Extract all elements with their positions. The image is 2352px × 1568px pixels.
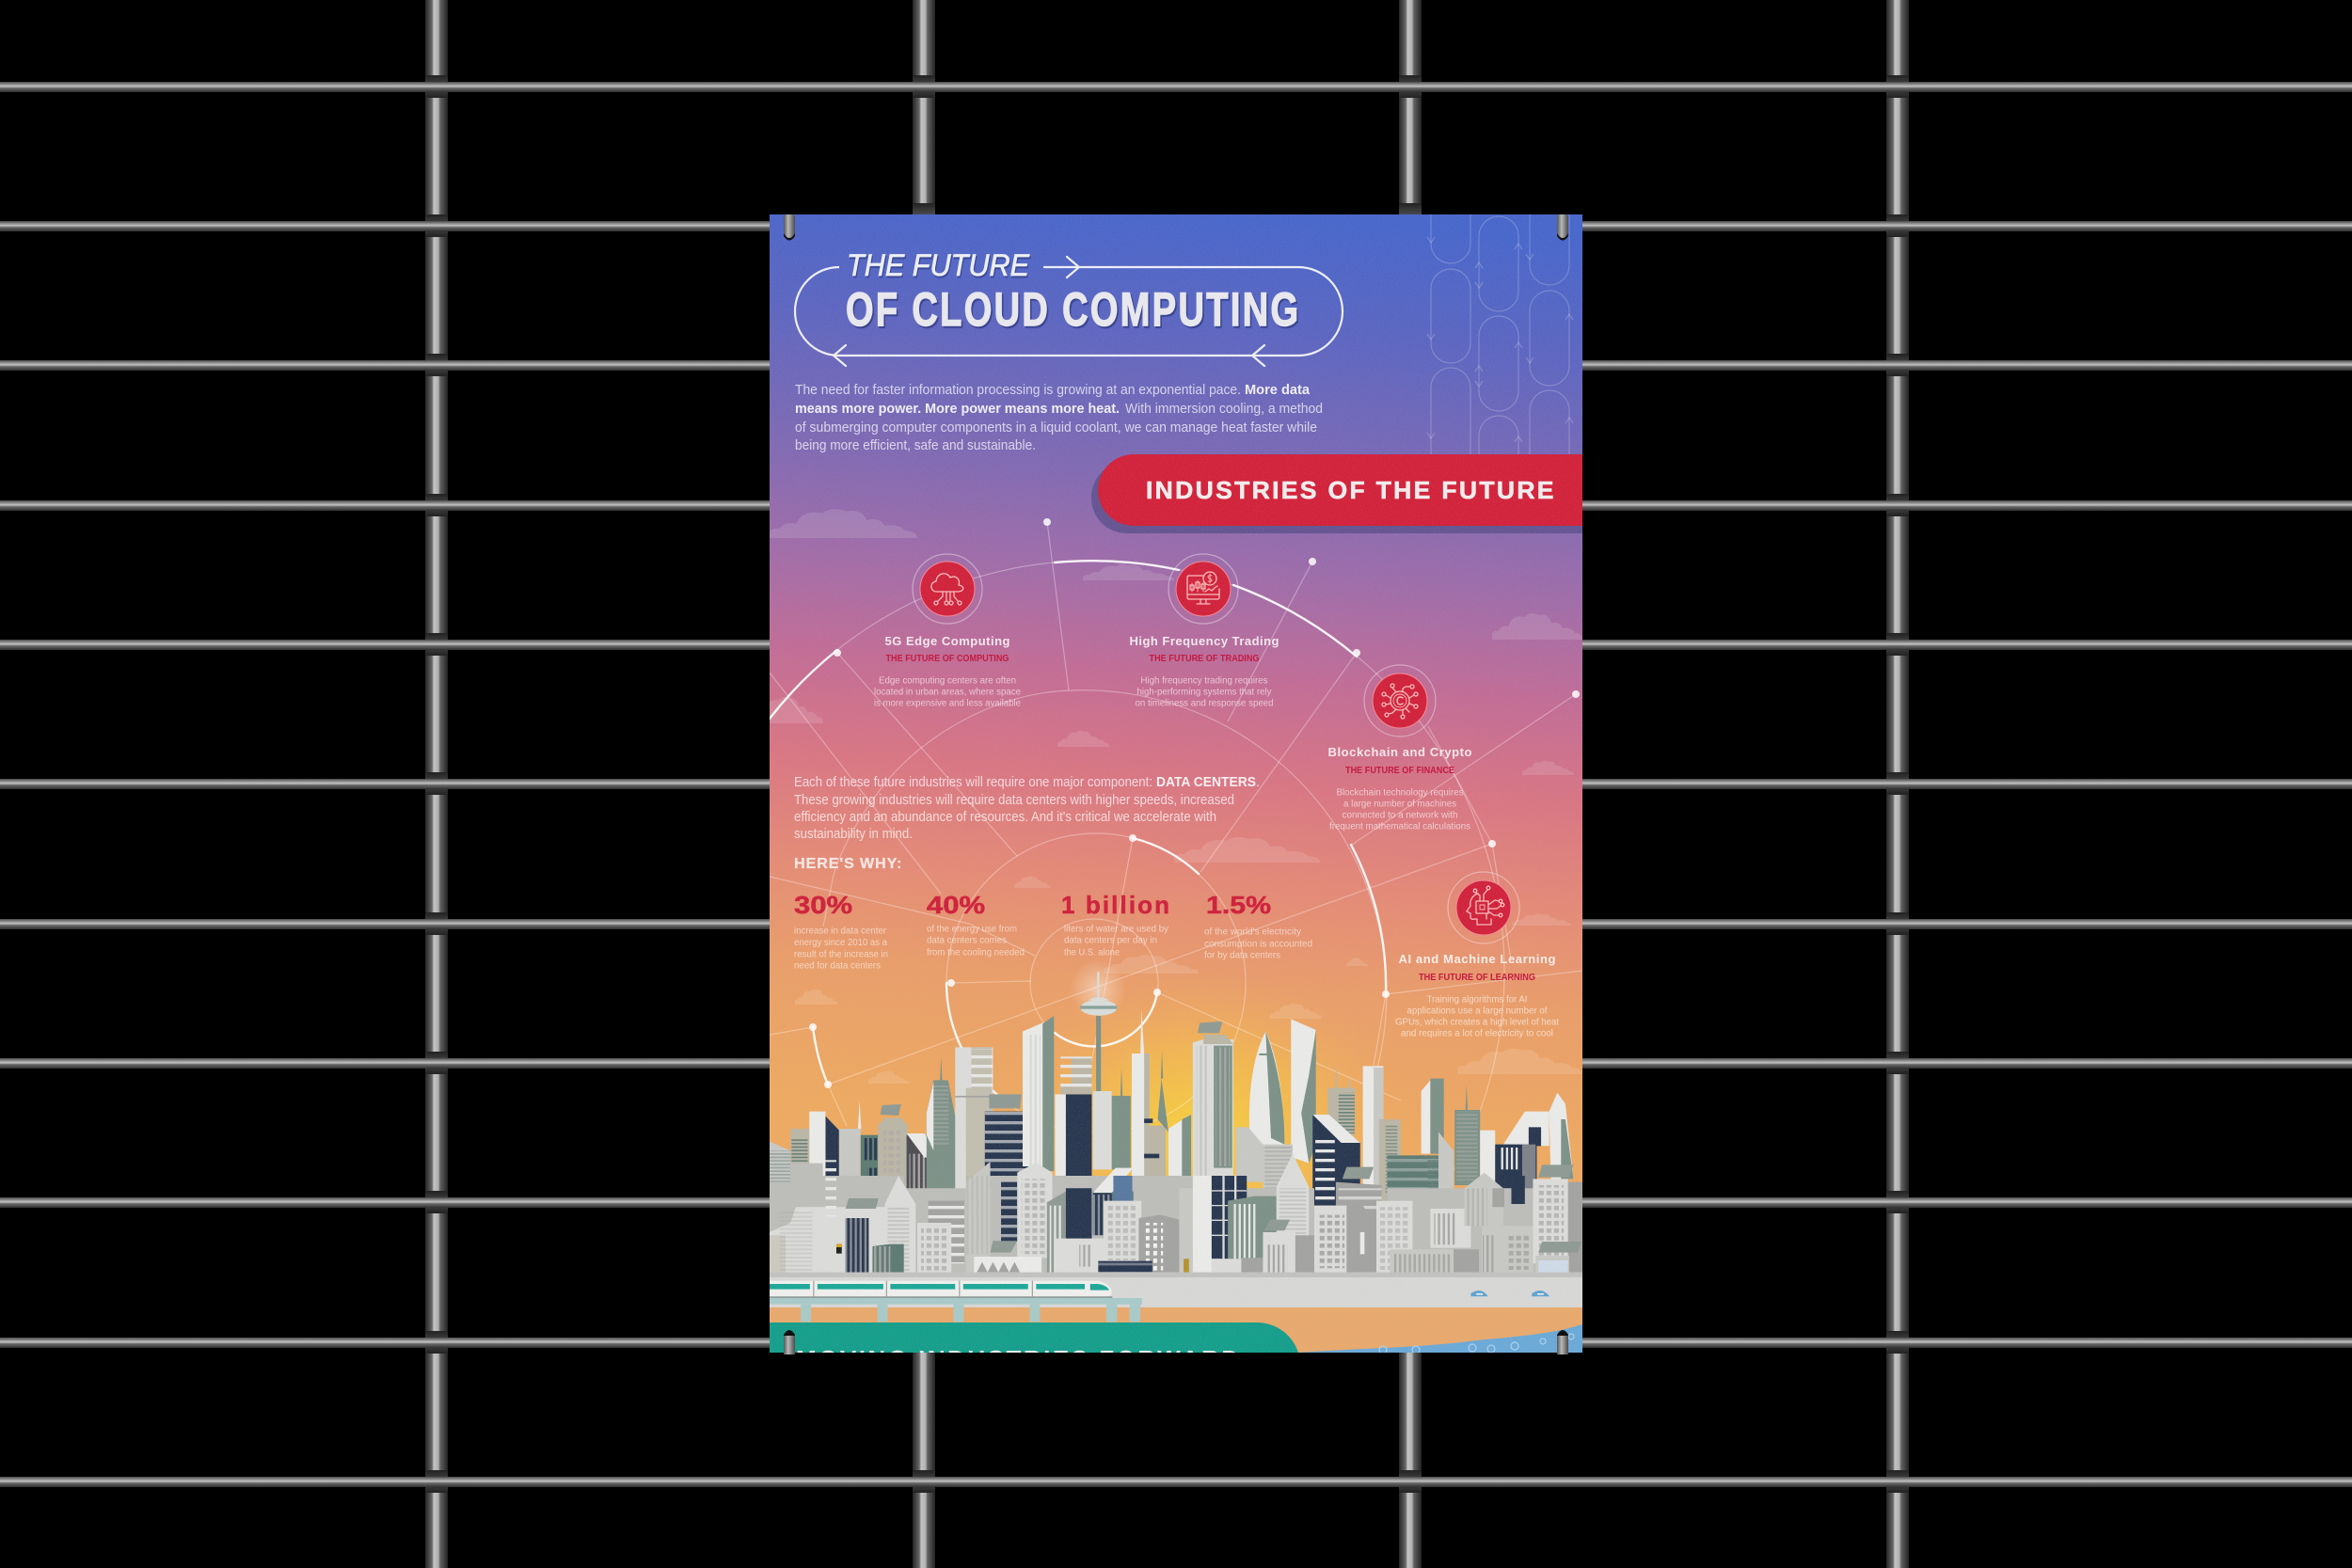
stat: 30%: energy since 2010 as a [794, 938, 887, 948]
stat: 1.5%: consumption is accounted [1204, 939, 1312, 950]
data centers paragraph: DATA CENTERS [1156, 775, 1256, 790]
data centers paragraph [794, 775, 1260, 842]
panel: 5G edge computing: Edge computing centers are often [879, 675, 1016, 687]
front row of buildings [770, 1154, 1582, 1275]
panel: high frequency trading [1129, 554, 1279, 709]
panel: AI and machine learning: Training algorithms for AI [1426, 995, 1528, 1005]
decorative pill pattern [1426, 214, 1573, 454]
panel: blockchain and crypto: frequent mathematical calculations [1329, 822, 1470, 832]
banner: industries of the future: INDUSTRIES OF THE FUTURE [1146, 476, 1553, 504]
stat: 1 billion: data centers per day in [1064, 935, 1157, 946]
stat: 40% [927, 893, 1025, 958]
city base mass filling gaps [770, 1164, 1582, 1275]
panel: blockchain and crypto: connected to a network with [1342, 811, 1458, 820]
stat: 1.5% [1204, 891, 1312, 961]
stat: 1.5%: 1.5% [1206, 891, 1271, 919]
stat: 1 billion: 1 billion [1061, 891, 1169, 919]
heading: here's why: HERE'S WHY: [794, 856, 901, 872]
panel: AI and machine learning [1395, 872, 1559, 1038]
water [1295, 1324, 1582, 1353]
ground road [770, 1273, 1582, 1307]
stat: 1.5%: of the world's electricity [1204, 927, 1301, 937]
stat: 1.5%: for by data centers [1204, 950, 1280, 961]
intro paragraph: With immersion cooling, a method [1125, 402, 1323, 417]
stat: 40%: data centers comes [927, 935, 1007, 946]
sand [770, 1307, 1582, 1354]
panel: AI and machine learning: AI and Machine Learning [1398, 952, 1556, 966]
panel: AI and machine learning: THE FUTURE OF LEARNING [1419, 972, 1535, 983]
stat: 1 billion [1062, 895, 1168, 956]
panel: blockchain and crypto [1328, 665, 1472, 832]
panel: high frequency trading: THE FUTURE OF TRADING [1150, 653, 1259, 664]
intro paragraph [795, 383, 1323, 453]
teal section band: moving industries forward: MOVING INDUSTRIES FORWARD [796, 1345, 1239, 1373]
stat: 30%: increase in data center [794, 926, 887, 937]
title text line 1: THE FUTURE [847, 248, 1030, 282]
panel: blockchain and crypto: THE FUTURE OF FINANCE [1345, 765, 1454, 776]
train [770, 1281, 1112, 1298]
data centers paragraph: efficiency and an abundance of resources. And it's critical we accelerate with [794, 810, 1216, 825]
hanging clips [784, 214, 1568, 1354]
panel: AI and machine learning: GPUs, which creates a high level of heat [1395, 1018, 1559, 1027]
network arcs and nodes [682, 518, 1582, 1383]
stat: 30% [794, 893, 888, 971]
intro paragraph: being more efficient, safe and sustainable. [795, 438, 1036, 453]
water bubbles [1379, 1334, 1574, 1354]
panel: AI and machine learning: applications use a large number of [1407, 1006, 1548, 1016]
tower [1080, 972, 1117, 1098]
icon: crypto coin network [1364, 665, 1436, 736]
panel: 5G edge computing: THE FUTURE OF COMPUTING [886, 653, 1009, 664]
data centers paragraph: Each of these future industries will require one major component: [794, 775, 1152, 790]
intro paragraph: of submerging computer components in a liquid coolant, we can manage heat faster while [795, 420, 1317, 436]
stat: 1 billion: liters of water are used by [1064, 924, 1168, 935]
title text line 2: OF CLOUD COMPUTING [846, 284, 1298, 336]
stat: 40%: from the cooling needed [927, 948, 1025, 958]
stat: 40%: of the energy use from [927, 924, 1017, 935]
icon: cloud circuit [913, 554, 982, 624]
stat: 30%: result of the increase in [794, 950, 888, 959]
stat: 40%: 40% [927, 893, 985, 919]
panel: 5G edge computing: is more expensive and less available [874, 698, 1021, 709]
panel: blockchain and crypto: a large number of machines [1343, 800, 1456, 809]
panel: 5G edge computing: 5G Edge Computing [884, 634, 1010, 648]
banner: industries of the future [1091, 454, 1599, 533]
stat: 1 billion: the U.S. alone [1064, 948, 1120, 958]
teal section band: moving industries forward [770, 1323, 1298, 1373]
city skyline [770, 972, 1582, 1354]
intro paragraph: means more power. More power means more heat. [795, 402, 1120, 417]
elevated rail viaduct [770, 1298, 1142, 1322]
back row of towers [770, 1009, 1573, 1275]
panel: AI and machine learning: and requires a lot of electricity to cool [1401, 1029, 1553, 1038]
panel: high frequency trading: high-performing systems that rely [1136, 687, 1272, 698]
panel: high frequency trading: High Frequency Trading [1129, 634, 1279, 648]
poster sky gradient [770, 214, 1582, 1353]
stat: 30%: 30% [794, 893, 852, 919]
paper grain [770, 214, 1582, 1353]
clouds [753, 509, 1582, 1084]
poster [770, 214, 1582, 1353]
panel: high frequency trading: High frequency trading requires [1140, 675, 1268, 687]
icon: trading monitor [1168, 554, 1238, 624]
intro paragraph: More data [1245, 383, 1311, 398]
data centers paragraph: These growing industries will require data centers with higher speeds, increased [794, 793, 1234, 808]
sun glow [1069, 1016, 1335, 1189]
title pill with arrows [795, 257, 1343, 366]
stat: 30%: need for data centers [794, 961, 881, 971]
panel: 5G edge computing [874, 554, 1021, 709]
observation tower glow [1073, 963, 1123, 1016]
title [795, 248, 1343, 366]
cars [1470, 1291, 1549, 1296]
intro paragraph: The need for faster information processing is growing at an exponential pace. [795, 383, 1241, 398]
panel: blockchain and crypto: Blockchain technology requires [1336, 788, 1464, 798]
panel: 5G edge computing: located in urban areas, where space [874, 687, 1021, 698]
panel: high frequency trading: on timeliness and response speed [1135, 698, 1274, 709]
data centers paragraph: sustainability in mind. [794, 827, 913, 842]
data centers paragraph: . [1256, 775, 1260, 790]
icon: AI head with chip [1448, 872, 1519, 943]
panel: blockchain and crypto: Blockchain and Crypto [1328, 745, 1472, 759]
